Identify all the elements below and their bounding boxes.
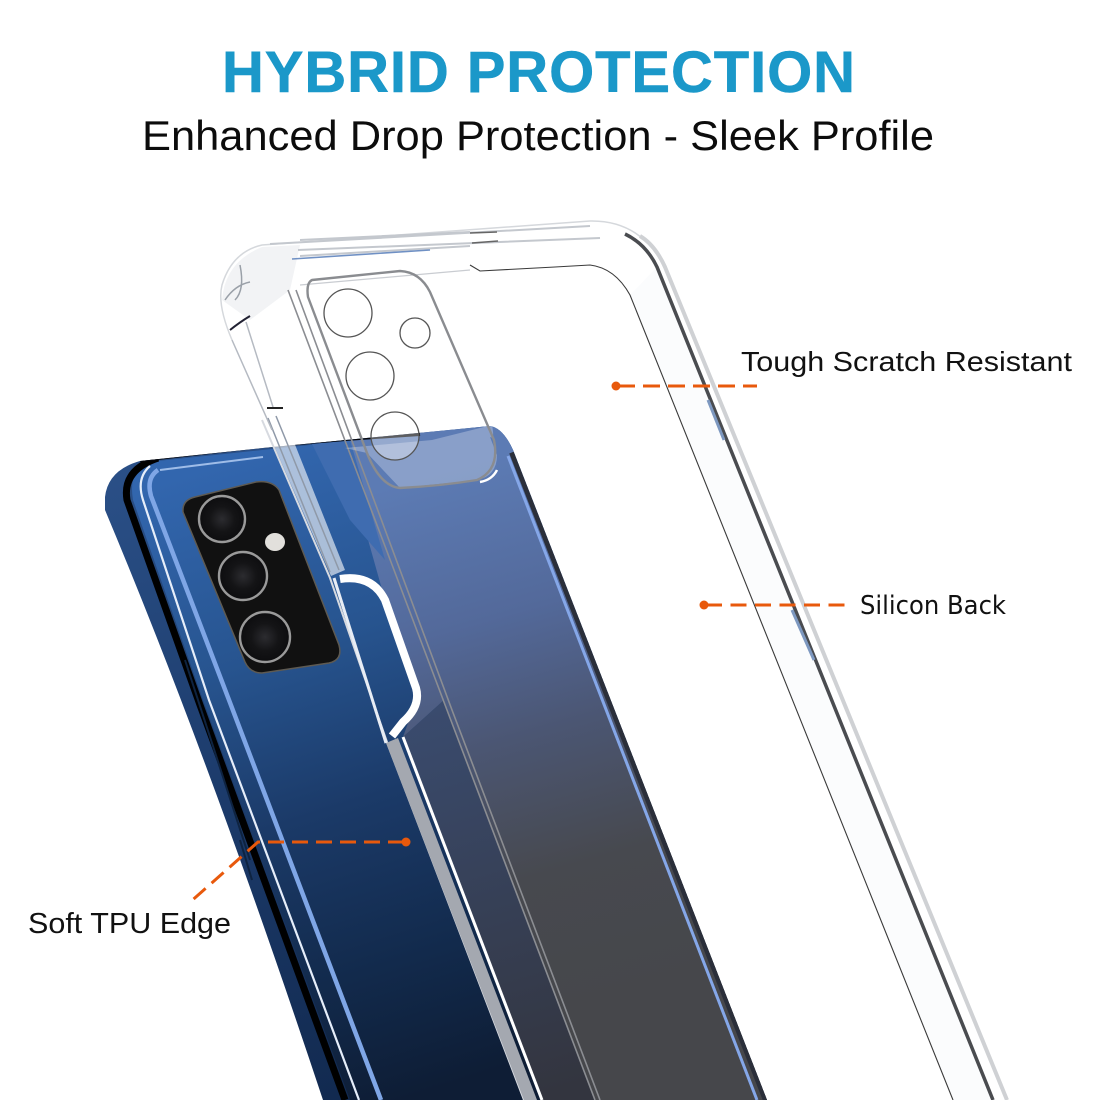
- phone edge bands: [126, 434, 767, 1100]
- camera lens middle: [219, 552, 267, 600]
- callout: tough scratch resistant: [612, 346, 1072, 390]
- leader line: [700, 600, 846, 610]
- case inner left lines: [288, 290, 600, 1100]
- label: Silicon Back: [860, 591, 1006, 621]
- case right edge: [625, 234, 1007, 1100]
- title: HYBRID PROTECTION: [222, 40, 855, 105]
- leader line: [612, 382, 757, 390]
- case camera hole 3: [346, 352, 394, 400]
- phone with clear case: [100, 221, 1007, 1100]
- case camera cutout: [308, 271, 497, 488]
- phone back: [100, 420, 800, 1100]
- callout: soft TPU edge: [28, 838, 410, 940]
- phone camera module: [183, 482, 340, 673]
- leader line: [188, 838, 410, 904]
- camera flash: [265, 533, 285, 551]
- subtitle: Enhanced Drop Protection - Sleek Profile: [142, 112, 934, 159]
- camera lens bottom: [240, 612, 290, 662]
- label: Soft TPU Edge: [28, 908, 231, 940]
- camera lens top: [199, 496, 245, 542]
- case camera hole 4: [371, 412, 419, 460]
- clear case side strip: [262, 412, 542, 1100]
- case side cutout: [340, 578, 417, 736]
- case outline top and corners: [221, 221, 1007, 1100]
- case camera hole 1: [324, 289, 372, 337]
- case camera hole 2: [400, 318, 430, 348]
- label: Tough Scratch Resistant: [741, 346, 1072, 377]
- callout: silicon back: [700, 591, 1006, 621]
- case right inner pale band: [630, 267, 993, 1100]
